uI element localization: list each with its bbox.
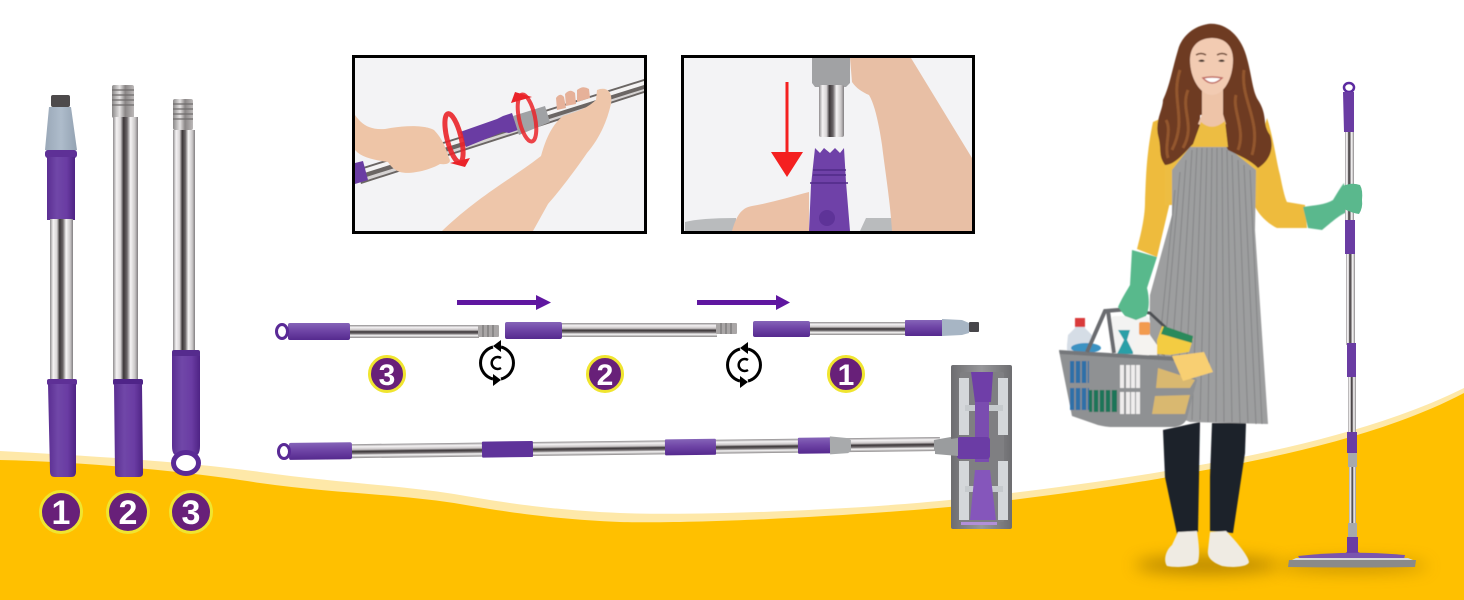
photo panel: push the handle into the mop head <box>682 56 974 232</box>
green slots <box>1089 390 1117 412</box>
number badge 2 (exploded view) <box>588 356 622 392</box>
hair <box>1157 24 1272 168</box>
connector ridges <box>810 170 848 183</box>
blue cap liquid <box>1071 343 1101 353</box>
grey collar lower <box>1348 523 1357 537</box>
floor shadow <box>1135 556 1279 574</box>
red down arrow <box>771 82 803 177</box>
yellow cloth <box>1172 352 1213 381</box>
mop floor shadow <box>1276 560 1428 572</box>
slot bars <box>1075 361 1111 412</box>
edge strip <box>961 522 997 525</box>
left hand <box>355 115 450 173</box>
number badge 1 (vertical handles) <box>40 492 82 532</box>
arrow head right <box>511 92 532 103</box>
loop <box>1344 83 1354 92</box>
bottle <box>1067 319 1092 352</box>
handle section 2 (vertical) <box>112 85 143 477</box>
basket rim <box>1059 350 1178 361</box>
sponge <box>1157 326 1193 355</box>
number badge 3 (exploded view) <box>370 356 404 392</box>
white bottle <box>1133 335 1157 355</box>
left shoe <box>1165 531 1199 567</box>
hand <box>732 192 809 231</box>
photo panel: twist to lock the handle <box>354 56 646 232</box>
large white bottle <box>1110 316 1150 356</box>
grey collar upper <box>1348 453 1357 467</box>
number badge 1 (exploded view): 1 <box>838 359 854 392</box>
right hand and forearm <box>442 89 611 231</box>
sleeve left of body <box>1137 118 1173 257</box>
mop pad <box>1288 560 1416 568</box>
white slots <box>1120 365 1140 414</box>
number badge 2 (vertical handles) <box>108 492 148 532</box>
purple coupling <box>460 113 518 147</box>
legs <box>1163 422 1246 534</box>
number badge 1 (vertical handles): 1 <box>52 494 70 532</box>
red rotation arrow left <box>441 112 467 164</box>
grey plate bars <box>959 378 1008 520</box>
mop head flat <box>1298 553 1405 559</box>
basket body <box>1059 351 1197 427</box>
number badge 1 (exploded view) <box>828 356 864 392</box>
number badge 3 (exploded view): 3 <box>379 359 395 392</box>
exploded section 2 <box>505 322 737 339</box>
flat mop head <box>935 365 1012 529</box>
glove right <box>1303 183 1348 230</box>
orange cap <box>1139 322 1150 335</box>
purple top piece <box>971 372 993 402</box>
exploded section 3 <box>276 323 499 340</box>
grey floor plate <box>685 218 892 231</box>
face <box>1190 38 1233 95</box>
arrow head left <box>450 158 470 167</box>
yellow collar <box>1192 121 1228 147</box>
eyes <box>1198 60 1225 62</box>
joint <box>957 437 990 459</box>
steel tube <box>819 85 844 137</box>
pole end grip <box>355 161 368 184</box>
fingers <box>556 87 590 110</box>
purple connector <box>809 148 850 231</box>
handle section 1 (vertical) <box>45 95 77 477</box>
purple arrow: section 3 into 2 <box>457 295 551 310</box>
exploded section 1 <box>753 319 979 337</box>
grey collar <box>812 58 850 87</box>
neck <box>1198 85 1226 130</box>
glove fingers over pole <box>1342 184 1362 214</box>
basket handle back <box>1125 310 1165 355</box>
forearm <box>850 58 972 231</box>
connector button <box>819 210 835 226</box>
hair strands <box>1166 70 1255 158</box>
woman with basket <box>1059 24 1348 567</box>
blue slots <box>1070 361 1089 410</box>
handle section 3 (vertical with hanging loop) <box>172 99 200 474</box>
steel pole <box>357 79 644 184</box>
mop plate <box>960 372 1004 522</box>
apron pleats <box>1154 148 1262 424</box>
basket handle front <box>1087 309 1130 353</box>
background: yellow wave <box>0 393 1464 600</box>
purple grips <box>1343 92 1357 453</box>
upright mop <box>1288 83 1416 568</box>
purple spine <box>975 402 989 462</box>
number badge 2 (exploded view): 2 <box>597 359 613 392</box>
number badge 3 (vertical handles) <box>170 492 212 532</box>
number badge 3 (vertical handles): 3 <box>182 494 200 532</box>
smile <box>1203 77 1222 83</box>
right shoe <box>1208 531 1249 567</box>
purple arrow: section 2 into 1 <box>697 295 790 310</box>
red rotation arrow right <box>514 93 540 143</box>
sponge green top <box>1161 326 1193 343</box>
yellow slots <box>1152 368 1195 414</box>
background: pale wave band <box>0 388 1464 600</box>
shirt body <box>1165 130 1258 205</box>
apron <box>1148 147 1268 424</box>
bottle cap <box>1075 318 1085 327</box>
mop plate light <box>1292 558 1413 560</box>
grey coupling <box>513 106 550 135</box>
grey neck <box>935 438 958 456</box>
cross bars <box>965 405 1003 492</box>
sleeve right of body <box>1254 118 1307 228</box>
twist icon left <box>481 340 513 386</box>
assembled mop handle <box>278 435 958 461</box>
purple bottom piece <box>970 470 996 520</box>
purple joint <box>1343 537 1364 555</box>
teal spray <box>1117 330 1134 354</box>
glove left <box>1118 250 1157 320</box>
eyebrows <box>1196 54 1227 55</box>
number badge 2 (vertical handles): 2 <box>119 494 137 532</box>
twist icon right <box>728 342 760 388</box>
